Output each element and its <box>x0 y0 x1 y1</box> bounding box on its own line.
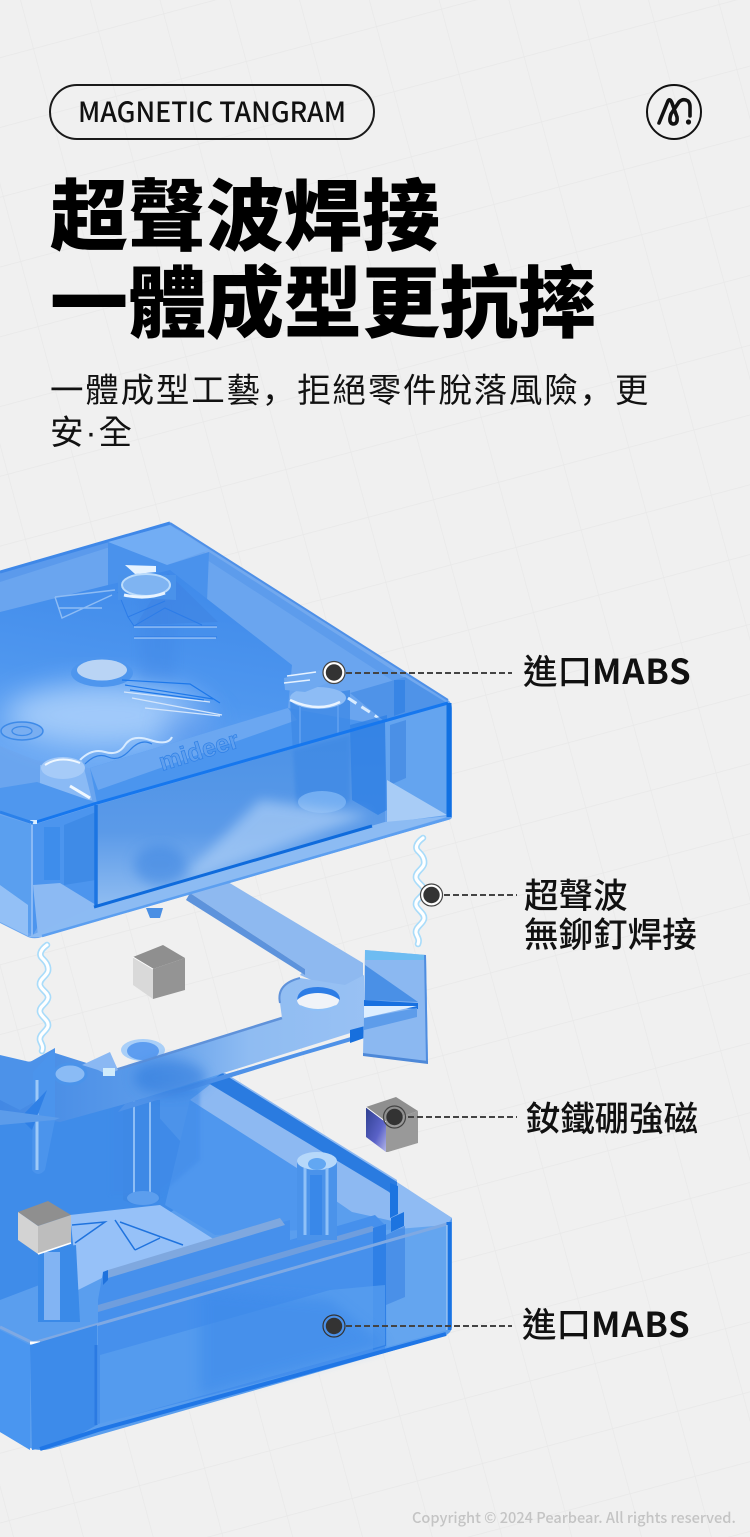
right corner face <box>385 1225 447 1347</box>
label: ultrasonic rivetless welding: 無鉚釘焊接 <box>524 907 697 957</box>
white highlights along wall edge <box>348 698 385 722</box>
post ghost inside window <box>293 735 350 810</box>
callout line: MABS bottom <box>323 1315 512 1337</box>
outer shell silhouette <box>0 523 452 938</box>
magnet cube back center <box>133 945 185 999</box>
bottom box silhouette <box>0 1070 452 1450</box>
callout line: neodymium magnet <box>384 1106 517 1128</box>
title <box>50 155 596 354</box>
label: ultrasonic rivetless welding <box>524 868 697 957</box>
floor light patch <box>5 683 205 747</box>
right screw post <box>297 1155 337 1240</box>
lower front band highlight <box>100 1285 385 1424</box>
bottom strip <box>28 816 450 937</box>
inner floor <box>0 1085 215 1300</box>
right side face <box>385 703 447 825</box>
floor shadow <box>140 590 175 680</box>
floor dome <box>71 659 222 716</box>
floor small ring <box>1 722 43 740</box>
diagonal bar <box>190 882 363 995</box>
ultrasonic wave right <box>416 838 424 944</box>
left inner square block <box>0 782 97 822</box>
end tab <box>363 950 428 1063</box>
front left corner <box>0 1330 30 1450</box>
bolt tip below shell <box>146 908 163 918</box>
logo icon <box>647 85 701 139</box>
brand pill: MAGNETIC TANGRAM: MAGNETIC TANGRAM <box>78 91 346 131</box>
label: neodymium magnet: 釹鐵硼強磁 <box>526 1091 698 1141</box>
label: MABS top: 進口MABS <box>523 644 692 694</box>
inner floor <box>0 570 292 768</box>
inner front wall <box>90 708 370 803</box>
right corner block <box>350 677 447 722</box>
wavy rib <box>80 737 172 760</box>
bottom box: transparent blue lower shell <box>0 1070 452 1450</box>
label: ultrasonic rivetless welding: 超聲波 <box>524 868 628 918</box>
inner wall <box>98 1215 385 1424</box>
callout line: MABS top <box>323 662 512 684</box>
corner post behind magnet <box>38 1245 80 1322</box>
title: 一體成型更抗摔 <box>50 242 596 354</box>
main plate <box>0 975 415 1122</box>
plate shaded front edge <box>118 1018 415 1112</box>
back corner block <box>108 525 209 565</box>
floor engraving lines <box>118 592 217 637</box>
light band along bottom <box>190 800 370 880</box>
right inner post <box>290 690 350 810</box>
front left post <box>40 760 92 800</box>
top box: transparent blue upper shell <box>0 523 452 938</box>
ultrasonic wave left <box>40 945 48 1051</box>
subtitle <box>50 363 650 454</box>
brand pill: MAGNETIC TANGRAM <box>50 85 374 139</box>
soft dark patch <box>134 1060 206 1096</box>
left joint with ring <box>0 1048 55 1110</box>
magnet cube on bottom post <box>18 1201 71 1254</box>
magnet cube with blue facet <box>366 1097 418 1152</box>
floor engraving lines <box>72 1220 183 1250</box>
back screw post <box>123 1100 160 1205</box>
rim line <box>0 1224 447 1343</box>
ring with hole <box>279 978 300 1003</box>
middle frame: ultrasonic weld plate <box>0 882 428 1174</box>
outer edges <box>40 1334 446 1449</box>
label: MABS bottom: 進口MABS <box>522 1297 691 1347</box>
front left face <box>0 815 33 935</box>
subtitle: 一體成型工藝，拒絕零件脫落風險，更 <box>50 363 650 412</box>
copyright: Copyright © 2024 Pearbear. All rights reserved. <box>412 1507 736 1528</box>
mideer embossed logo: mideer <box>156 726 242 777</box>
back right rim <box>190 1073 397 1222</box>
top rim back left <box>0 523 209 582</box>
small ring back <box>121 1039 165 1061</box>
downward pin <box>32 1048 55 1174</box>
rim highlight <box>33 703 448 823</box>
subtitle: 安·全 <box>50 405 134 454</box>
callout line: ultrasonic weld <box>420 884 517 906</box>
rear screw post <box>118 575 176 600</box>
title: 超聲波焊接 <box>50 155 440 267</box>
inner window <box>97 722 385 905</box>
top rim right <box>170 523 448 700</box>
